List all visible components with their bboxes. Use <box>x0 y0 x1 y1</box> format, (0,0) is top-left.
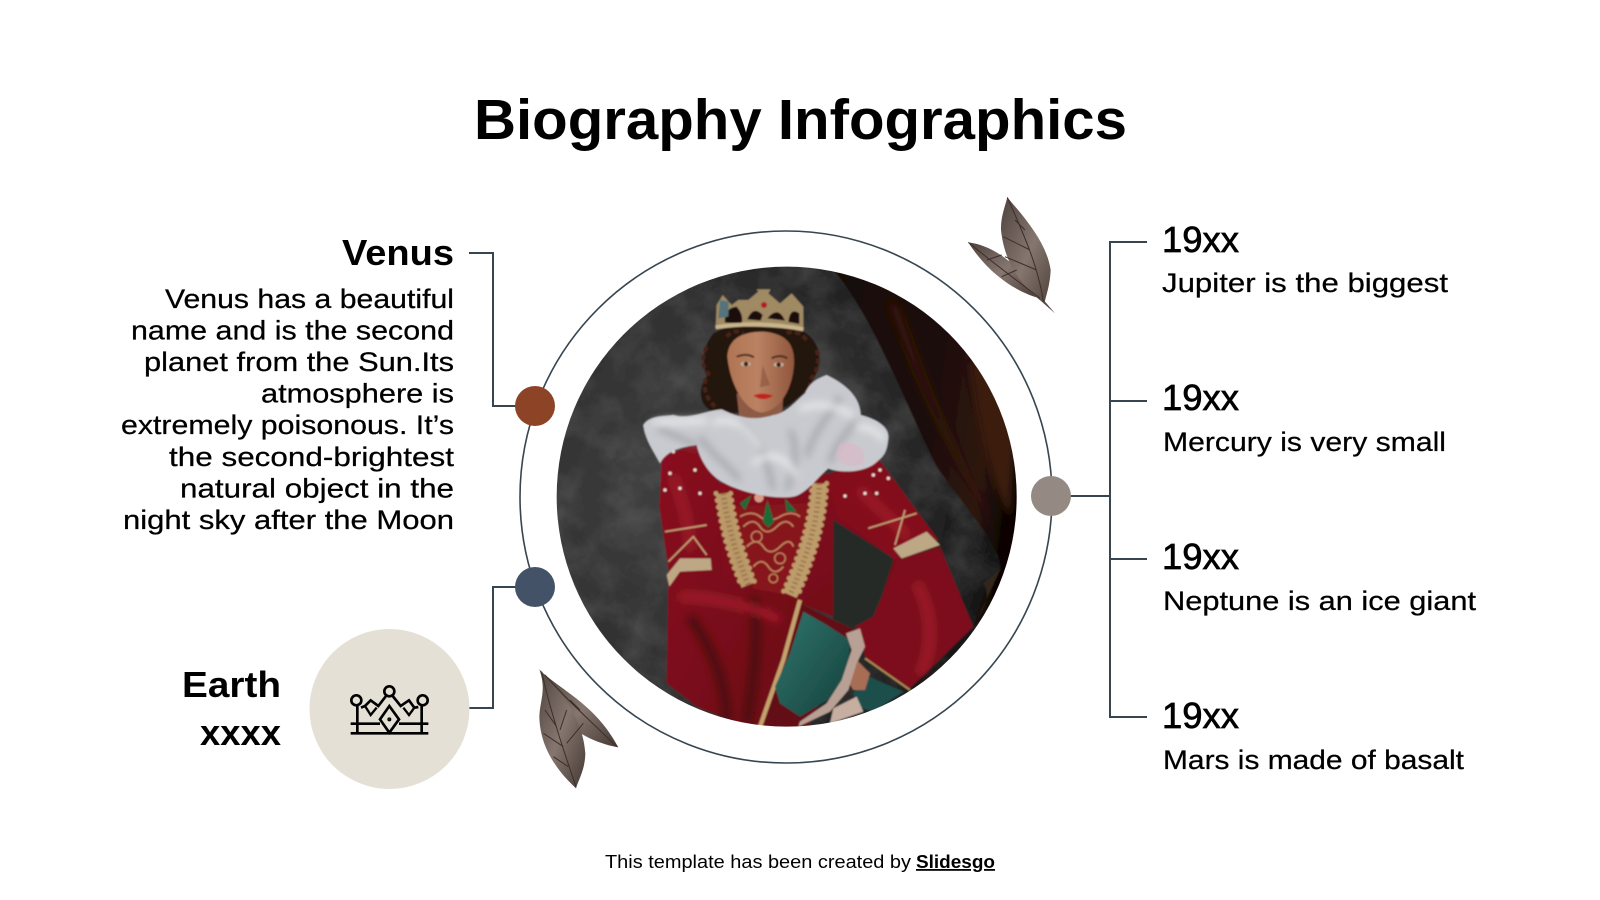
gold seam <box>760 600 800 727</box>
hand <box>848 660 870 690</box>
leaf cluster top right <box>968 197 1055 313</box>
gold bodice panel <box>733 503 812 597</box>
timeline entry 3 <box>1162 536 1477 616</box>
footer credit: This template has been created by <box>605 852 911 872</box>
text block: Venus description: night sky after the Moon <box>123 505 454 535</box>
connector: Venus to brown dot <box>469 253 520 406</box>
left shoulder and sleeve <box>659 443 800 730</box>
text block: Venus description: planet from the Sun.Its <box>144 347 454 377</box>
text block: Venus description: natural object in the <box>180 474 454 504</box>
heading: Venus: Venus <box>342 232 454 273</box>
text block: Venus description: name and is the second <box>131 316 454 346</box>
text block: Venus description: atmosphere is <box>261 378 454 408</box>
hair <box>701 325 819 413</box>
timeline entry 1: 19xx <box>1162 219 1239 260</box>
jewels <box>740 495 797 512</box>
connector: timeline bracket <box>1060 242 1147 717</box>
footer credit: Slidesgo <box>916 852 995 872</box>
text block: Venus description: Venus has a beautiful <box>165 284 454 314</box>
leaf cluster bottom left <box>539 669 618 788</box>
label: Earth: Earth <box>182 664 281 705</box>
sleeve trims <box>667 558 712 587</box>
portrait photo: queen with crown <box>553 260 1027 730</box>
dress right side and torso <box>719 470 904 617</box>
circle with crown icon <box>310 629 470 789</box>
timeline entry 2: Mercury is very small <box>1163 427 1446 457</box>
timeline entry 3: Neptune is an ice giant <box>1163 586 1477 616</box>
velvet shading <box>690 597 756 723</box>
connector: blue dot to Earth <box>469 587 520 708</box>
crown <box>716 289 803 330</box>
blue dot <box>515 567 555 607</box>
gap between arm and torso <box>833 520 894 628</box>
timeline entry 3: 19xx <box>1162 536 1239 577</box>
timeline entry 1 <box>1162 219 1449 298</box>
icon: crown <box>351 686 428 733</box>
timeline entry 2 <box>1162 377 1446 457</box>
pearls <box>663 450 890 498</box>
face <box>727 332 794 413</box>
timeline entry 1: Jupiter is the biggest <box>1162 268 1449 298</box>
teal cuff <box>775 612 850 717</box>
title: Biography Infographics <box>474 88 1127 152</box>
text block: Venus description: the second-brightest <box>169 442 455 472</box>
timeline entry 2: 19xx <box>1162 377 1239 418</box>
decorative ring around portrait <box>520 231 1052 763</box>
ruff <box>643 375 888 497</box>
grey dot <box>1031 476 1071 516</box>
label: Earth: xxxx <box>200 712 281 753</box>
lace <box>798 628 865 727</box>
timeline entry 4 <box>1162 695 1465 775</box>
label: Earth <box>182 664 281 753</box>
timeline entry 4: Mars is made of basalt <box>1163 745 1465 775</box>
text block: Venus description: extremely poisonous. It’s <box>121 410 454 440</box>
neck <box>737 393 783 423</box>
timeline entry 4: 19xx <box>1162 695 1239 736</box>
text block: Venus description <box>121 284 455 535</box>
brown dot <box>515 386 555 426</box>
